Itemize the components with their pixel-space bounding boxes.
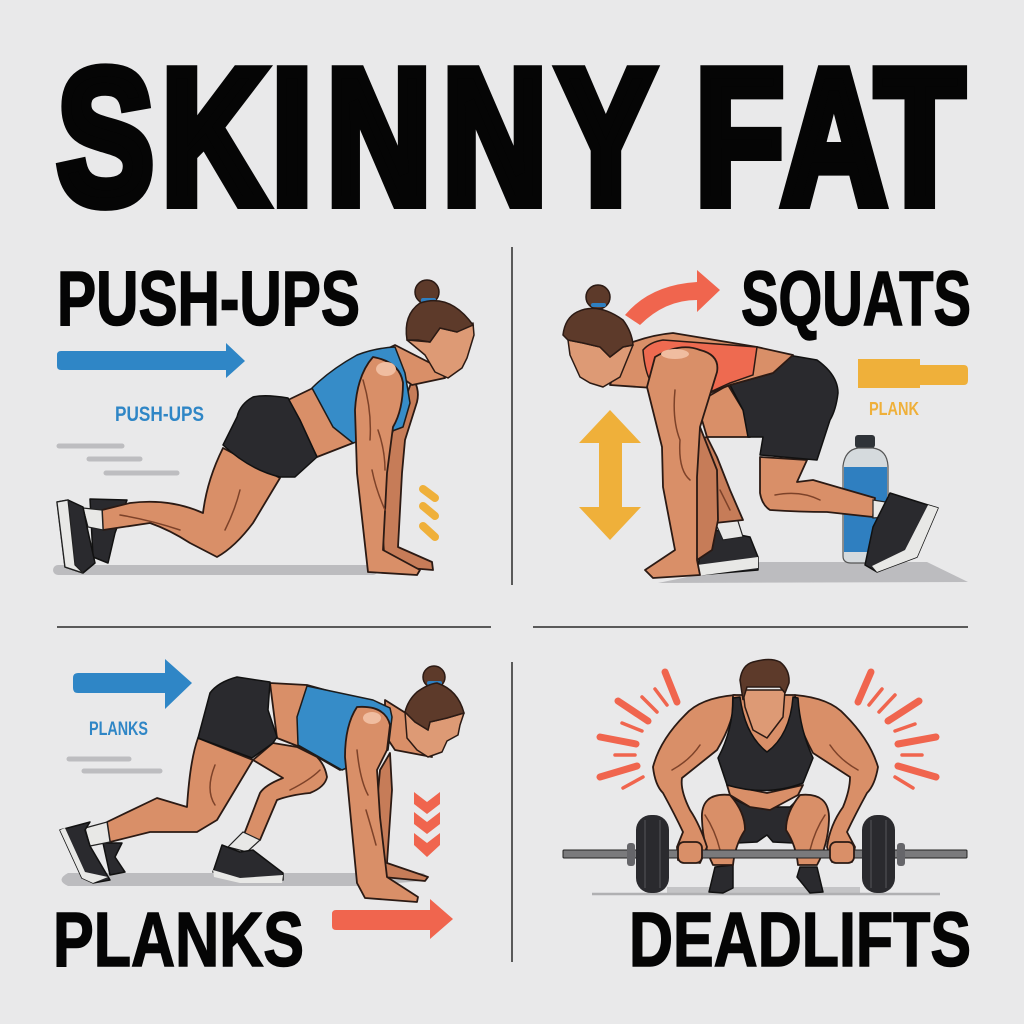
heading: push-ups: PUSH-UPS: [57, 256, 360, 342]
dividers: [57, 247, 968, 962]
panel: squats: [563, 256, 971, 583]
motion lines: [59, 446, 177, 473]
barbell: [563, 815, 967, 893]
label: push-ups small: PUSH-UPS: [115, 403, 204, 426]
burst: left: [600, 672, 677, 788]
floor line: [592, 887, 940, 895]
panel: deadlifts: [563, 660, 971, 983]
floor shadow: [62, 873, 426, 886]
arrow: red right: [332, 899, 453, 939]
label: plank small: PLANK: [869, 399, 919, 419]
floor shadow: [53, 565, 378, 575]
title: SKINNY FAT: [58, 30, 964, 243]
figure: deadlift: [563, 660, 967, 893]
arrow: blue right: [73, 659, 192, 709]
burst: right: [858, 672, 936, 788]
arrow: red curved: [625, 270, 720, 325]
chevrons: red: [414, 792, 440, 857]
figure: squat: [563, 285, 938, 578]
figure: push-up: [57, 280, 474, 575]
chevrons: yellow: [423, 489, 435, 537]
figure: plank: [60, 666, 464, 902]
motion lines: [69, 759, 160, 771]
arrow: yellow vertical double: [579, 410, 641, 540]
arrow: blue right: [57, 343, 245, 378]
panel: push-ups: [53, 256, 474, 575]
panel: planks: [53, 659, 464, 983]
label: planks small: PLANKS: [89, 719, 148, 740]
arrow: yellow block: [858, 359, 968, 388]
heading: planks: PLANKS: [53, 897, 304, 983]
floor shadow: [658, 562, 968, 583]
water bottle: [843, 435, 888, 563]
